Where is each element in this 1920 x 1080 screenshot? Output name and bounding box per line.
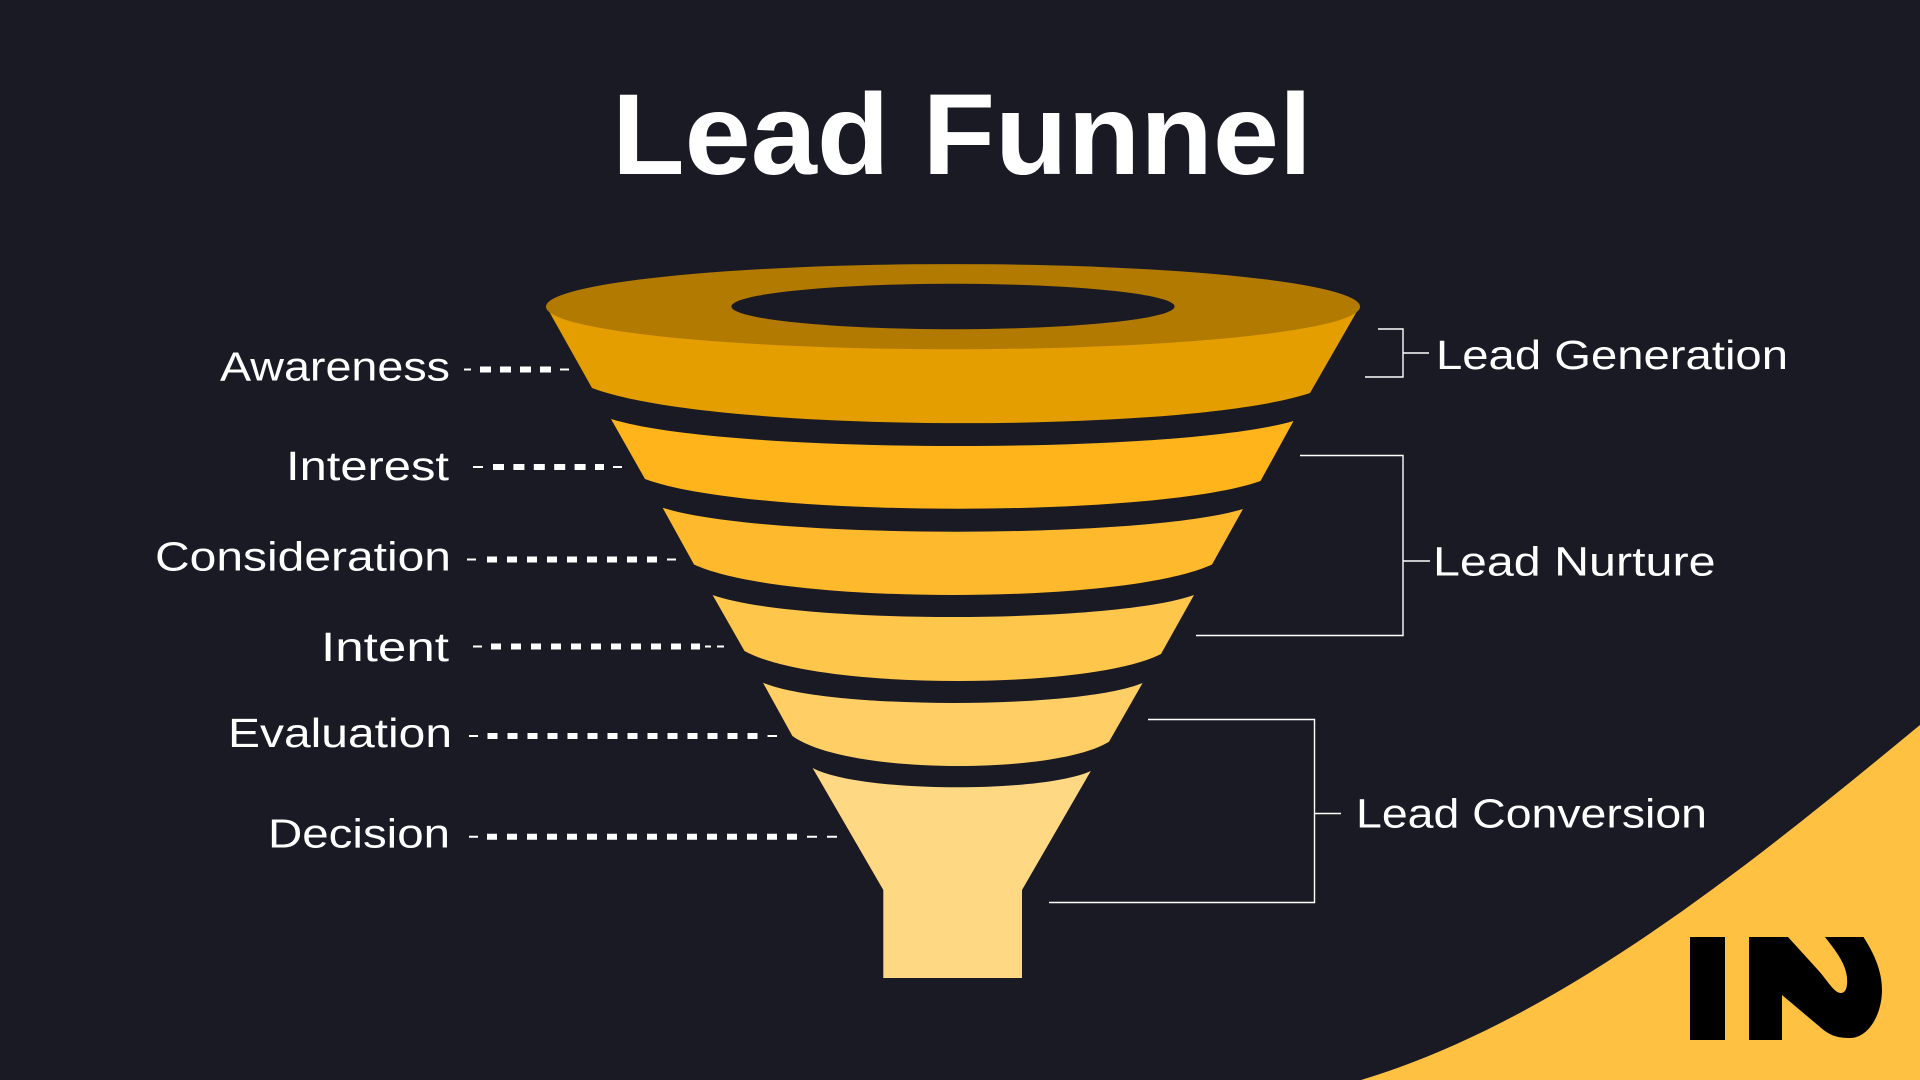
corner accent shape [1361,725,1920,1080]
label: Lead Conversion: Lead Conversion [1356,790,1707,836]
leader: Interest [473,466,622,468]
bracket: Lead Conversion [1049,720,1341,902]
funnel band: intent [713,595,1194,681]
funnel top rim [546,264,1360,349]
leader: Intent [473,646,724,648]
label: Consideration: Consideration [155,534,451,580]
leader: Evaluation [469,735,777,737]
label: Decision: Decision [268,810,450,856]
funnel band: decision [813,768,1091,978]
label: Evaluation: Evaluation [228,710,452,756]
leader: Decision [469,836,837,838]
label: Lead Generation: Lead Generation [1436,332,1788,378]
bracket: Lead Generation [1365,329,1429,377]
leader: Consideration [467,558,676,560]
title: Lead Funnel [612,71,1312,199]
bracket: Lead Nurture [1196,456,1430,636]
funnel opening [731,284,1175,329]
funnel [546,264,1360,978]
funnel band: consideration [663,508,1243,595]
leader: Awareness [464,368,569,370]
label: Awareness: Awareness [220,344,450,390]
label: Intent: Intent [321,624,450,670]
funnel band: evaluation [763,683,1143,766]
label: Lead Nurture: Lead Nurture [1433,538,1716,584]
label: Interest: Interest [286,443,450,489]
logo [1690,937,1882,1040]
funnel band: awareness [546,306,1360,423]
funnel band: interest [611,419,1294,509]
